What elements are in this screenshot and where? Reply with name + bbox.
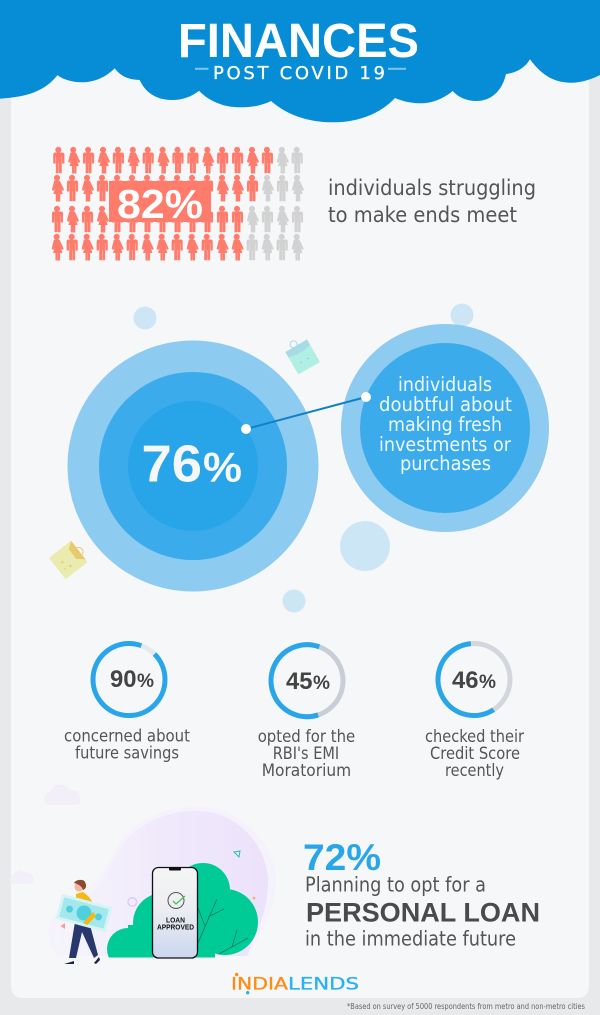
chart: 76% concentric circle	[68, 340, 318, 592]
ring: 90%	[78, 629, 180, 730]
small clouds	[10, 784, 81, 884]
person carrying banknote	[56, 880, 112, 964]
row 1	[54, 147, 303, 173]
small accents	[60, 851, 255, 929]
connector line	[241, 392, 371, 434]
logo: IndiaLends: LENDS	[288, 974, 359, 993]
text: planning for a personal loan: in the immediate future	[305, 927, 516, 951]
badge: 82%: 82%	[117, 181, 203, 227]
lilac blob	[49, 807, 276, 956]
text: individuals struggling	[328, 176, 536, 227]
text: planning for a personal loan: PERSONAL LOAN	[306, 898, 540, 928]
row 4	[52, 234, 304, 260]
ring: 45%	[262, 635, 352, 726]
logo: IndiaLends	[231, 973, 359, 994]
text: individuals doubtful	[379, 373, 512, 475]
label: checked their Credit Score recently: recently	[445, 761, 504, 780]
phone	[152, 868, 198, 958]
label: concerned about future savings	[64, 727, 190, 762]
text: individuals doubtful: investments or	[379, 433, 512, 456]
branches	[198, 899, 248, 954]
text: individuals doubtful: individuals	[398, 373, 492, 396]
row 2	[52, 175, 304, 201]
label: concerned about future savings: future savings	[75, 744, 179, 762]
text: individuals doubtful: doubtful about	[379, 393, 512, 416]
text: individuals struggling: individuals struggling	[328, 176, 536, 200]
text: planning for a personal loan	[305, 873, 540, 951]
logo: IndiaLends: INDIA	[231, 974, 289, 993]
green bush	[107, 863, 258, 958]
ring: 46%: %	[479, 672, 496, 693]
phone: LOAN	[166, 918, 185, 925]
row 3	[52, 206, 303, 232]
title: FINANCES	[178, 15, 419, 68]
label: checked their Credit Score recently: checked their	[425, 727, 524, 746]
phone: APPROVED	[157, 925, 194, 932]
label: checked their Credit Score recently: Credit Score	[430, 744, 520, 763]
label: opted for the RBI's EMI Moratorium: opted for the	[258, 727, 355, 746]
icon: yellow shopping bag	[49, 539, 90, 579]
panel: doubtful circle	[341, 324, 549, 532]
header cloud banner	[0, 0, 600, 122]
ring: 46%	[424, 630, 524, 729]
icon: teal shopping bag	[282, 334, 320, 375]
ring: 90%: 90	[110, 666, 136, 693]
text: individuals struggling: to make ends meet	[328, 203, 517, 227]
pictogram: 82% of people	[52, 147, 304, 260]
ring: 90%: %	[137, 671, 154, 692]
label: checked their Credit Score recently	[425, 727, 524, 780]
label: opted for the RBI's EMI Moratorium: RBI's EMI	[273, 744, 339, 763]
label: concerned about future savings: concerned about	[64, 727, 190, 746]
text: individuals doubtful: making fresh	[388, 413, 502, 436]
chart: 76% concentric circle: %	[203, 444, 242, 491]
subtitle: POST COVID 19	[213, 63, 385, 84]
decorative bubbles	[134, 304, 474, 612]
text: individuals doubtful: purchases	[400, 452, 491, 475]
ring: 45%: %	[313, 673, 330, 694]
illustration: loan approved	[10, 811, 268, 964]
text: planning for a personal loan: Planning to opt for a	[305, 873, 486, 897]
label: opted for the RBI's EMI Moratorium	[258, 727, 355, 780]
stat: 72%: 72%	[303, 837, 381, 878]
ring: 45%: 45	[286, 668, 312, 695]
label: opted for the RBI's EMI Moratorium: Moratorium	[262, 761, 351, 780]
ring: 46%: 46	[452, 667, 478, 694]
chart: 76% concentric circle: 76	[142, 436, 202, 494]
